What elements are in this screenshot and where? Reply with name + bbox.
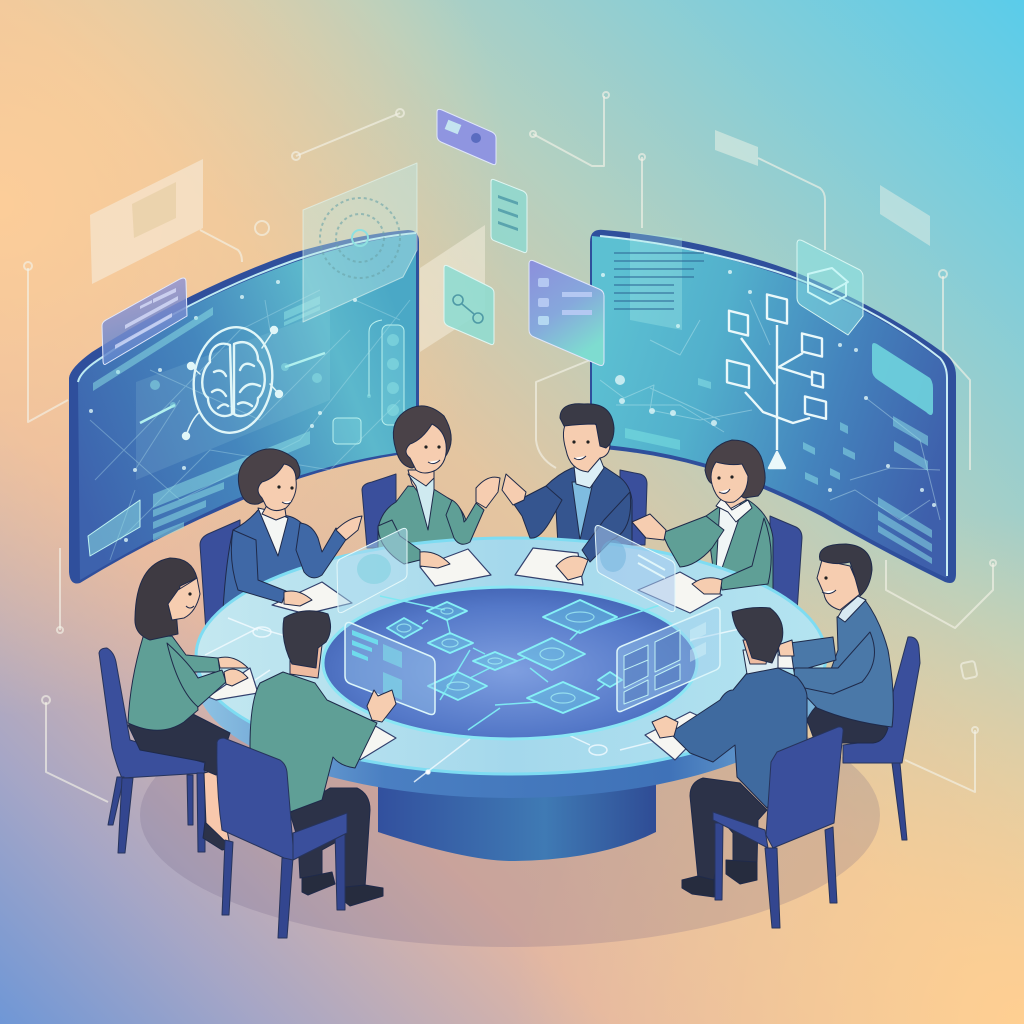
person: man back-center torso and head xyxy=(546,404,632,545)
round table xyxy=(196,538,826,798)
panel: hexagon cube xyxy=(797,240,863,335)
head xyxy=(732,608,783,674)
chair xyxy=(217,738,347,938)
floor shadow xyxy=(140,683,880,947)
glowing flow nodes xyxy=(387,600,622,713)
network dots on left screen xyxy=(89,280,357,542)
data table on right screen xyxy=(614,232,704,330)
hand xyxy=(652,716,678,738)
right curved screen xyxy=(590,230,956,583)
tree diagram xyxy=(727,295,826,468)
translucent circular hologram panel xyxy=(303,163,417,322)
panel: front-right hologram xyxy=(617,608,720,712)
panel: teal node card xyxy=(444,265,494,345)
circuit lines in background xyxy=(24,92,996,802)
person: woman back-right torso and head xyxy=(705,440,773,592)
person: woman back-left torso and head xyxy=(223,449,320,610)
arm: man back-center xyxy=(502,474,631,580)
chair xyxy=(99,648,205,853)
left curved screen xyxy=(69,230,419,584)
books on table xyxy=(208,548,812,760)
panel: teal card xyxy=(491,179,527,253)
seated legs xyxy=(290,788,383,906)
arm: woman back-right xyxy=(632,514,771,594)
arm: woman back-left xyxy=(231,516,362,606)
node connectors xyxy=(380,596,660,730)
node icons xyxy=(397,608,594,703)
torso xyxy=(670,668,807,808)
inner screen xyxy=(323,587,697,739)
chair: back-center man xyxy=(620,470,647,545)
holographic table panels xyxy=(337,526,720,714)
arm: woman back-center xyxy=(378,477,500,568)
person: woman back-center torso and head xyxy=(378,406,468,556)
panel: left rear hologram xyxy=(337,528,407,613)
floating cream panels xyxy=(90,130,930,352)
seated legs xyxy=(682,778,767,897)
person: woman left side with chair xyxy=(99,558,248,853)
left screen UI bars xyxy=(88,296,404,556)
chair xyxy=(843,637,920,840)
head xyxy=(283,611,331,678)
arms of back row people xyxy=(231,474,771,606)
network lines on right screen xyxy=(600,300,940,520)
floating small panels xyxy=(437,109,863,365)
chair: back-left woman xyxy=(200,520,240,632)
network lines on left screen xyxy=(90,290,410,560)
panel: right rear hologram xyxy=(595,526,675,612)
torso xyxy=(250,672,377,812)
chair: back-center woman xyxy=(362,474,396,548)
hand xyxy=(367,690,396,722)
person: man right side with chair xyxy=(778,544,920,840)
chair xyxy=(713,727,843,928)
seated figure xyxy=(778,544,893,743)
panel: front-left hologram xyxy=(345,623,435,714)
seated figure xyxy=(128,558,248,850)
network dots on right screen xyxy=(601,270,936,507)
right screen UI bars xyxy=(625,343,933,564)
purple panel over left screen xyxy=(102,278,187,364)
inner darker panels of left screen xyxy=(136,310,330,480)
chair: back-right woman xyxy=(770,516,802,612)
panel: purple card top xyxy=(437,109,496,165)
icon: brain xyxy=(183,322,282,439)
person: man front-left with chair xyxy=(217,611,396,938)
table trace lines xyxy=(205,618,780,782)
person: man front-right with chair xyxy=(652,608,843,928)
panel: purple to teal card xyxy=(529,260,604,366)
table pedestal xyxy=(378,770,656,861)
